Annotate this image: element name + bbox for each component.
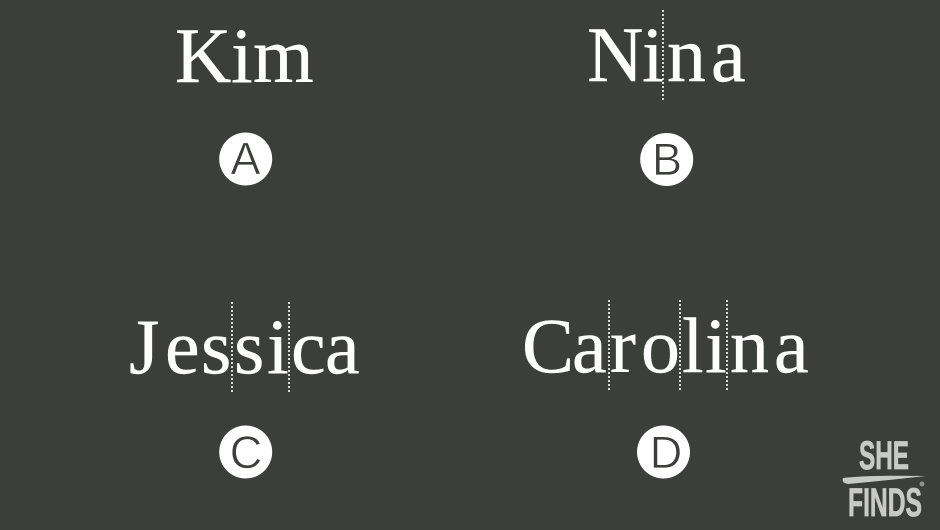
name: Kim: Kim (175, 12, 314, 99)
badge D: D (650, 427, 682, 478)
badge C: C (230, 427, 262, 478)
badge D (637, 426, 690, 478)
badge A: A (230, 133, 261, 184)
logo: She Finds: SHE (859, 434, 909, 478)
badge B: B (652, 134, 682, 185)
badge C (219, 426, 272, 478)
name: Carolina with dividers: Carolina (522, 302, 809, 389)
badge B (640, 133, 693, 186)
name: Jessica with dividers: Jessica (129, 303, 360, 390)
name: Nina with divider: Nina (587, 11, 746, 98)
logo: She Finds (843, 434, 926, 525)
badge A (219, 132, 272, 186)
